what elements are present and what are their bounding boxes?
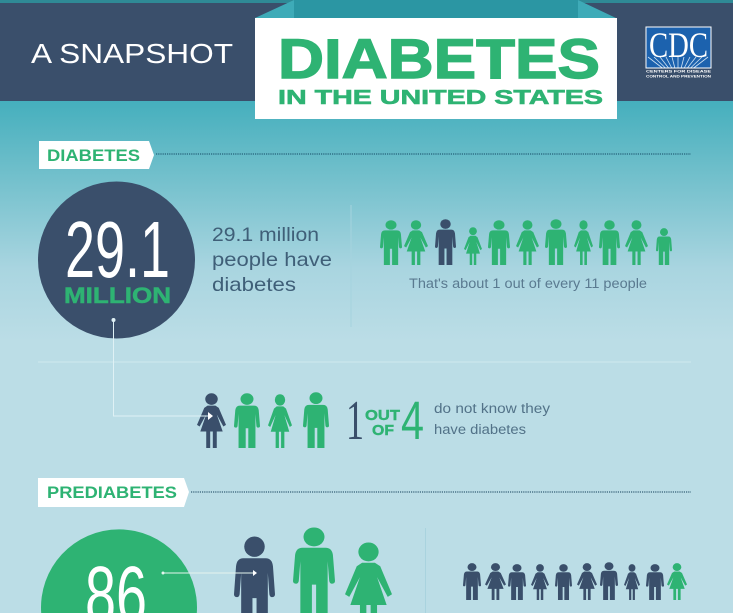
stat: 1 out of 4: OF bbox=[372, 422, 394, 439]
icon group: three large people bbox=[234, 527, 392, 613]
stat circle: 86 bbox=[41, 529, 197, 613]
logo: CDC: CONTROL AND PREVENTION bbox=[646, 74, 711, 78]
connector arrow: circle to people bbox=[112, 318, 213, 420]
connector arrow: 86 to person bbox=[162, 570, 257, 576]
icon row: 9 of 10 people bbox=[463, 562, 687, 600]
logo: CDC: CENTERS FOR DISEASE bbox=[646, 68, 711, 74]
dotted rule: diabetes bbox=[156, 153, 691, 155]
section tag: diabetes bbox=[39, 141, 154, 169]
text: do not know they have diabetes bbox=[434, 401, 550, 437]
stat: 1 out of 4: OUT bbox=[365, 407, 400, 424]
stat circle: 29.1 million: MILLION bbox=[64, 283, 171, 308]
section tag: prediabetes bbox=[38, 478, 189, 507]
heading: a snapshot: A SNAPSHOT bbox=[31, 38, 233, 69]
section tag: diabetes: DIABETES bbox=[47, 147, 140, 165]
title ribbon bbox=[255, 0, 616, 19]
divider: vertical prediabetes bbox=[424, 528, 426, 613]
divider: vertical bbox=[350, 205, 352, 327]
dotted rule: prediabetes bbox=[191, 491, 691, 493]
text: 29.1 million people have diabetes bbox=[212, 224, 332, 296]
stat: 1 out of 4: 1 bbox=[346, 390, 364, 452]
section tag: prediabetes: PREDIABETES bbox=[47, 484, 177, 502]
title box: DIABETES bbox=[278, 27, 600, 90]
text: do not know they have diabetes: have diabetes bbox=[434, 422, 526, 437]
icon row: 1 of 4 people bbox=[197, 392, 329, 448]
title box: IN THE UNITED STATES bbox=[278, 86, 603, 109]
stat circle: 29.1 million: 29.1 bbox=[65, 205, 170, 294]
logo: CDC bbox=[645, 25, 713, 82]
text: 29.1 million people have diabetes: diabetes bbox=[212, 274, 296, 296]
icon row: 1 of 11 people bbox=[380, 219, 672, 265]
stat circle: 29.1 million bbox=[38, 182, 195, 338]
text: do not know they have diabetes: do not know they bbox=[434, 401, 550, 416]
text: 29.1 million people have diabetes: people have bbox=[212, 249, 332, 271]
title box bbox=[255, 18, 617, 119]
text: 29.1 million people have diabetes: 29.1 million bbox=[212, 224, 319, 246]
stat: 1 out of 4 bbox=[346, 390, 424, 452]
logo: CDC: CDC bbox=[649, 25, 708, 65]
stat: 1 out of 4: 4 bbox=[401, 391, 424, 451]
header band bbox=[0, 0, 733, 101]
divider: horizontal bbox=[38, 361, 691, 363]
caption: 1 out of every 11: That's about 1 out of every 11 people bbox=[409, 276, 647, 291]
